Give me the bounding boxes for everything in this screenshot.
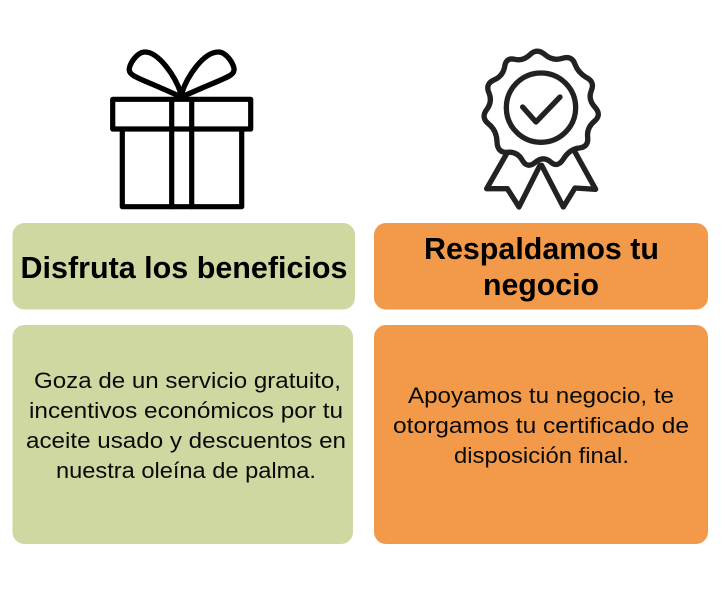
text: disfruta description: aceite usado y descuentos en [26, 428, 346, 453]
panel: respaldamos description [374, 325, 708, 544]
panel: disfruta heading [12, 223, 355, 310]
text: disfruta description: incentivos económicos por tu [29, 398, 343, 423]
icon: gift box [113, 52, 251, 207]
panel: respaldamos heading [374, 223, 708, 310]
text: disfruta description [26, 368, 346, 483]
heading: disfruta los beneficios: Disfruta los beneficios [20, 250, 348, 285]
panel: disfruta description [12, 325, 353, 544]
text: disfruta description: Goza de un servicio gratuito, [34, 368, 341, 393]
text: disfruta description: nuestra oleína de palma. [56, 458, 316, 483]
text: respaldamos description: disposición final. [454, 443, 629, 468]
heading: respaldamos tu negocio: Respaldamos tu [424, 231, 659, 266]
heading: respaldamos tu negocio [424, 231, 659, 302]
heading: respaldamos tu negocio: negocio [483, 267, 599, 302]
text: respaldamos description [393, 383, 689, 468]
text: respaldamos description: otorgamos tu certificado de [393, 413, 689, 438]
icon: certification rosette [484, 51, 598, 207]
text: respaldamos description: Apoyamos tu negocio, te [408, 383, 674, 408]
